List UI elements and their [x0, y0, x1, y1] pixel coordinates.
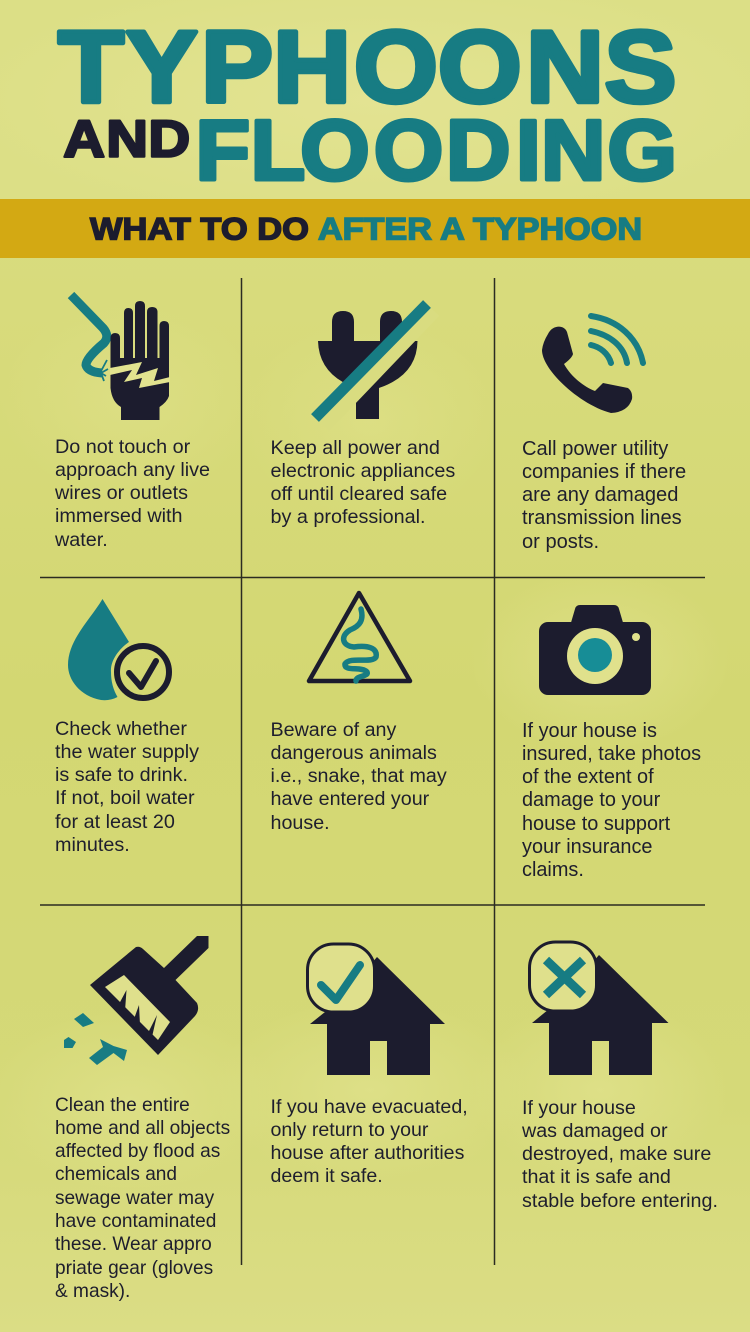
text: damaged house: destroyed, make sure [522, 1143, 711, 1165]
text: insurance: insured, take photos [522, 743, 701, 765]
text: call utility: companies if there [522, 461, 686, 483]
icon: camera [539, 605, 651, 695]
text: water supply: minutes. [55, 834, 130, 856]
text: insurance: house to support [522, 813, 670, 835]
text: clean home: priate gear (gloves [55, 1258, 213, 1279]
icon: telephone [542, 316, 643, 413]
text: live wires: immersed with [55, 505, 183, 527]
text: clean home: affected by flood as [55, 1141, 220, 1162]
text: clean home: Clean the entire [55, 1094, 190, 1116]
subtitle teal text: AFTER A TYPHOON [318, 210, 642, 246]
text: power off: electronic appliances [270, 460, 455, 482]
text: dangerous animals [270, 718, 447, 834]
text: live wires: water. [55, 529, 108, 551]
text: dangerous animals: Beware of any [270, 718, 396, 740]
icon: house with cross bubble [530, 942, 668, 1075]
text: live wires: wires or outlets [55, 482, 188, 504]
text: water supply: for at least 20 [55, 811, 175, 833]
icon: house with check bubble [308, 944, 445, 1075]
icon: crossed-out plug [315, 304, 432, 424]
text: clean home: & mask). [55, 1281, 130, 1302]
text: clean home: have contaminated [55, 1211, 216, 1232]
text: damaged house: that it is safe and [522, 1166, 671, 1188]
text: damaged house: stable before entering. [522, 1190, 718, 1212]
text: dangerous animals: dangerous animals [270, 742, 437, 764]
text: water supply: Check whether [55, 718, 187, 740]
text: water supply: If not, boil water [55, 787, 195, 809]
icon: snake warning triangle [309, 593, 410, 681]
text: call utility: are any damaged [522, 484, 678, 506]
text: clean home: sewage water may [55, 1188, 214, 1209]
text: live wires: approach any live [55, 459, 210, 481]
text: clean home [55, 1094, 230, 1302]
text: water supply: the water supply [55, 741, 199, 763]
title line: TYPHOONS: TYPHOONS [58, 11, 677, 124]
text: call utility: transmission lines [522, 507, 682, 529]
text: call utility: Call power utility [522, 438, 668, 460]
text: insurance: claims. [522, 859, 584, 881]
text: call utility: or posts. [522, 531, 599, 553]
text: clean home: chemicals and [55, 1164, 177, 1185]
text: damaged house: was damaged or [522, 1120, 668, 1142]
text: return after evacuation: If you have evacuated, [270, 1096, 468, 1118]
text: dangerous animals: house. [270, 812, 330, 834]
text: return after evacuation [270, 1096, 468, 1187]
text: insurance: If your house is [522, 720, 657, 742]
text: power off [270, 436, 455, 528]
text: dangerous animals: have entered your [270, 788, 429, 810]
text: power off: by a professional. [270, 506, 426, 528]
text: live wires: Do not touch or [55, 436, 190, 458]
text: clean home: home and all objects [55, 1118, 230, 1139]
text: water supply: is safe to drink. [55, 764, 188, 786]
text: insurance: your insurance [522, 836, 652, 858]
icon: water drop with check [68, 599, 169, 700]
text: power off: Keep all power and [270, 436, 440, 458]
text: insurance: of the extent of [522, 766, 654, 788]
text: power off: off until cleared safe [270, 483, 447, 505]
text: return after evacuation: house after authorities [270, 1142, 464, 1164]
text: return after evacuation: only return to your [270, 1119, 428, 1141]
title [56, 11, 677, 198]
subtitle dark text: WHAT TO DO [90, 210, 309, 246]
header background [0, 0, 750, 199]
subtitle band [0, 199, 750, 258]
text: damaged house [522, 1096, 718, 1212]
text: clean home: these. Wear appro [55, 1234, 212, 1255]
text: return after evacuation: deem it safe. [270, 1165, 383, 1187]
text: call utility [522, 438, 686, 553]
text: damaged house: If your house [522, 1096, 636, 1118]
text: insurance [522, 720, 701, 881]
text: water supply [55, 718, 199, 856]
text: insurance: damage to your [522, 789, 660, 811]
title line: FLOODING: FLOODING [196, 103, 677, 198]
text: dangerous animals: i.e., snake, that may [270, 765, 447, 787]
icon: hand and live wire [71, 295, 170, 420]
title word: AND: AND [63, 110, 190, 168]
icon: cleaning brush and debris [64, 936, 208, 1065]
text: live wires [55, 436, 210, 551]
